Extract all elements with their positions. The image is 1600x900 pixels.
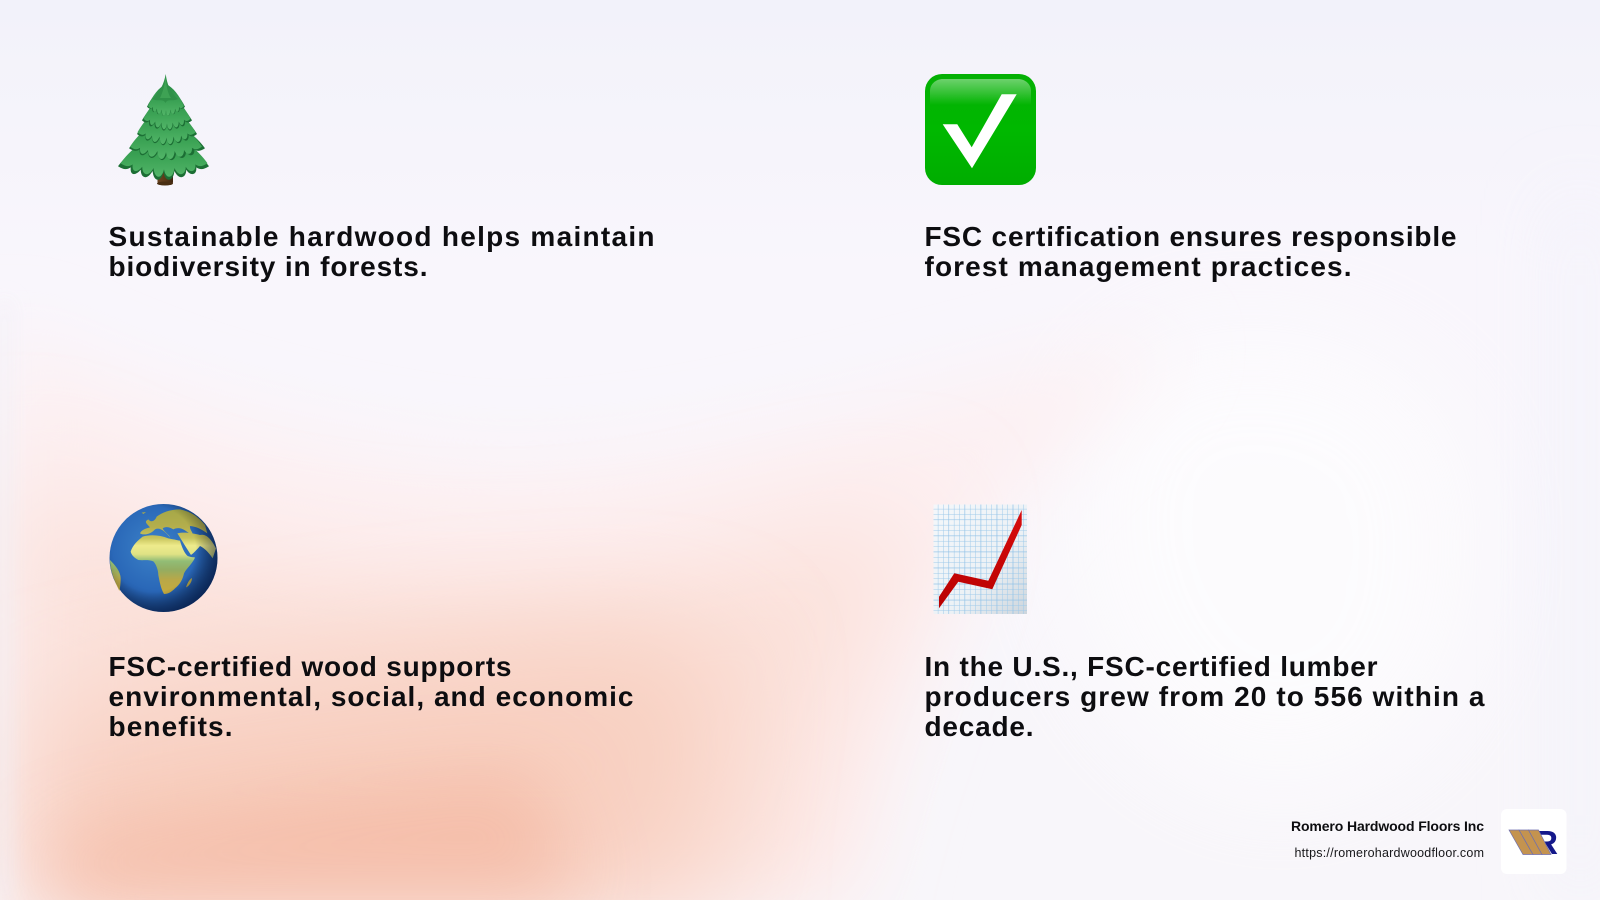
text: growth statement: producers grew from 20 to 556 within a bbox=[924, 681, 1485, 712]
text: benefits statement: environmental, social, and economic bbox=[108, 681, 634, 712]
panel: FSC certification bbox=[924, 74, 1456, 282]
footer: company branding bbox=[1291, 809, 1566, 874]
company URL: https://romerohardwoodfloor.com bbox=[1294, 846, 1484, 860]
company name: Romero Hardwood Floors Inc bbox=[1291, 818, 1484, 834]
text: biodiversity statement: Sustainable hardwood helps maintain bbox=[108, 221, 654, 252]
text: FSC certification statement: forest management practices. bbox=[924, 251, 1352, 282]
text: benefits statement: FSC-certified wood supports bbox=[108, 651, 512, 682]
panel: benefits bbox=[108, 504, 634, 742]
logo: R bbox=[1534, 824, 1558, 861]
text: FSC certification statement: FSC certification ensures responsible bbox=[924, 221, 1456, 252]
text: benefits statement: benefits. bbox=[108, 711, 232, 742]
icon: rising chart bbox=[934, 504, 1027, 614]
panel: biodiversity bbox=[108, 74, 654, 282]
text: biodiversity statement: biodiversity in forests. bbox=[108, 251, 428, 282]
text: growth statement: decade. bbox=[924, 711, 1034, 742]
icon: globe bbox=[110, 504, 218, 612]
icon: evergreen tree bbox=[118, 74, 209, 186]
panel: growth bbox=[924, 504, 1485, 742]
logo bbox=[1501, 809, 1566, 874]
icon: check mark button bbox=[925, 74, 1036, 185]
text: growth statement: In the U.S., FSC-certified lumber bbox=[924, 651, 1378, 682]
